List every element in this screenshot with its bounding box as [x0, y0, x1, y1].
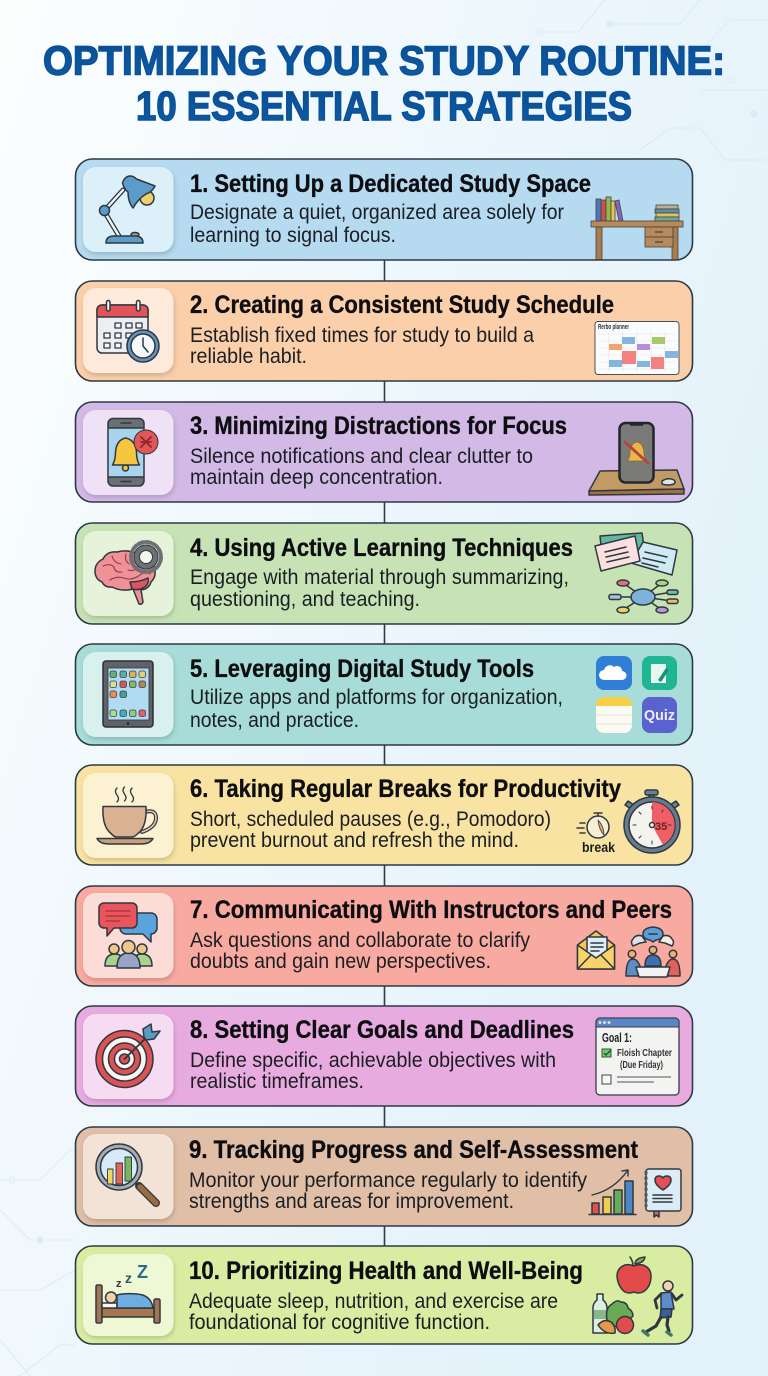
panel: strategy 5	[76, 644, 692, 745]
description 2: Establish fixed times for study to build a	[190, 323, 534, 347]
description 3	[190, 444, 533, 489]
description 6	[190, 807, 551, 852]
heading 8: 8. Setting Clear Goals and Deadlines	[190, 1016, 574, 1044]
icon tile 8	[83, 1014, 174, 1099]
description 1	[190, 200, 564, 247]
icon: magnifier with bar chart	[96, 1144, 156, 1203]
icon tile 5	[83, 652, 174, 737]
title: OPTIMIZING YOUR STUDY ROUTINE:	[43, 38, 725, 84]
description 4: questioning, and teaching.	[190, 587, 420, 611]
description 7: Ask questions and collaborate to clarify	[190, 928, 530, 952]
description 10	[189, 1289, 558, 1334]
heading 10: 10. Prioritizing Health and Well-Being	[189, 1257, 583, 1285]
description 9	[189, 1168, 587, 1213]
panel: strategy 2	[76, 281, 692, 381]
description 5: Utilize apps and platforms for organization,	[190, 685, 563, 709]
heading 6: 6. Taking Regular Breaks for Productivity	[190, 775, 621, 803]
title	[43, 38, 725, 129]
icon tile 3	[83, 410, 174, 495]
illustration: goal checklist window: Floish Chapter	[617, 1047, 672, 1059]
card background 10	[76, 1246, 692, 1344]
icon tile 7	[83, 893, 174, 978]
icon tile 1	[83, 167, 174, 252]
icon tile 6	[83, 773, 174, 858]
card background 9	[76, 1127, 692, 1226]
icon tile 4	[83, 531, 174, 616]
illustration: study app tiles	[596, 656, 677, 733]
sleep letters: z	[125, 1270, 132, 1286]
description 7	[190, 928, 530, 973]
icon tile 10	[83, 1254, 174, 1336]
description 1: learning to signal focus.	[190, 223, 396, 247]
card background 4	[76, 523, 692, 624]
illustration: envelope and group meeting	[578, 927, 680, 977]
description 10: Adequate sleep, nutrition, and exercise are	[189, 1289, 558, 1313]
panel: strategy 9	[76, 1127, 692, 1226]
illustration: goal checklist window: (Due Friday)	[620, 1059, 663, 1071]
description 2	[190, 323, 534, 368]
illustration: weekly planner: Rerbo planner	[598, 324, 629, 331]
description 10: foundational for cognitive function.	[189, 1310, 490, 1334]
heading 5: 5. Leveraging Digital Study Tools	[190, 655, 534, 683]
icon: tablet	[103, 661, 153, 727]
description 7: doubts and gain new perspectives.	[190, 949, 491, 973]
card background 7	[76, 886, 692, 986]
illustration: silenced phone on table	[589, 423, 684, 495]
illustration: goal checklist window: Goal 1:	[602, 1031, 632, 1045]
illustration: flashcards and mind map	[595, 533, 678, 613]
timeline connector	[384, 260, 386, 1246]
description 8	[190, 1048, 556, 1093]
icon tile 2	[83, 288, 174, 373]
title: 10 ESSENTIAL STRATEGIES	[136, 83, 632, 129]
icon: desk lamp	[100, 176, 155, 243]
description 9: Monitor your performance regularly to identify	[189, 1168, 587, 1192]
panel: strategy 7	[76, 886, 692, 986]
card background 1	[76, 159, 692, 260]
card background 5	[76, 644, 692, 745]
sleep letters	[116, 1262, 148, 1290]
card background 3	[76, 402, 692, 502]
icon: brain and gear	[95, 542, 161, 604]
card background 8	[76, 1006, 692, 1106]
sleep letters: z	[116, 1278, 122, 1290]
illustration: break timer and stopwatch: 35	[655, 821, 667, 833]
description 4: Engage with material through summarizing,	[190, 565, 569, 589]
icon: calendar and clock	[97, 300, 159, 362]
heading 9: 9. Tracking Progress and Self-Assessment	[189, 1136, 639, 1164]
heading 2: 2. Creating a Consistent Study Schedule	[190, 291, 614, 319]
heading 1: 1. Setting Up a Dedicated Study Space	[190, 170, 591, 198]
illustration: weekly planner	[595, 322, 679, 374]
description 3: Silence notifications and clear clutter to	[190, 444, 533, 468]
icon: phone with bell	[108, 418, 158, 486]
icon: chat bubbles and people	[99, 903, 157, 968]
illustration: break timer and stopwatch	[577, 790, 680, 855]
sleep letters: Z	[137, 1262, 148, 1282]
panel: strategy 1	[76, 159, 692, 260]
description 5: notes, and practice.	[190, 708, 359, 732]
heading 7: 7. Communicating With Instructors and Peers	[190, 896, 672, 924]
description 9: strengths and areas for improvement.	[189, 1189, 514, 1213]
icon: target and arrow	[96, 1024, 160, 1088]
illustration: break timer and stopwatch: break	[582, 839, 615, 855]
heading 4: 4. Using Active Learning Techniques	[190, 534, 573, 562]
description 6: Short, scheduled pauses (e.g., Pomodoro)	[190, 807, 551, 831]
heading 3: 3. Minimizing Distractions for Focus	[190, 412, 567, 440]
icon: sleeping in bed	[96, 1285, 160, 1323]
description 5	[190, 685, 563, 732]
card background 6	[76, 765, 692, 865]
illustration: study desk	[591, 197, 683, 260]
description 1: Designate a quiet, organized area solely for	[190, 200, 564, 224]
description 3: maintain deep concentration.	[190, 465, 443, 489]
quiz app label: Quiz	[644, 707, 675, 724]
description 4	[190, 565, 569, 611]
panel: strategy 3	[76, 402, 692, 502]
panel: strategy 6	[76, 765, 692, 865]
panel: strategy 10	[76, 1246, 692, 1344]
description 8: realistic timeframes.	[190, 1069, 364, 1093]
icon tile 9	[83, 1134, 174, 1219]
card background 2	[76, 281, 692, 381]
description 2: reliable habit.	[190, 344, 307, 368]
panel: strategy 4	[76, 523, 692, 624]
panel: strategy 8	[76, 1006, 692, 1106]
illustration: goal checklist window	[596, 1018, 679, 1095]
icon: coffee cup	[97, 787, 156, 844]
description 6: prevent burnout and refresh the mind.	[190, 828, 519, 852]
illustration: apple, healthy food and runner	[593, 1257, 682, 1335]
description 8: Define specific, achievable objectives with	[190, 1048, 556, 1072]
illustration: growth chart and journal	[589, 1169, 681, 1217]
